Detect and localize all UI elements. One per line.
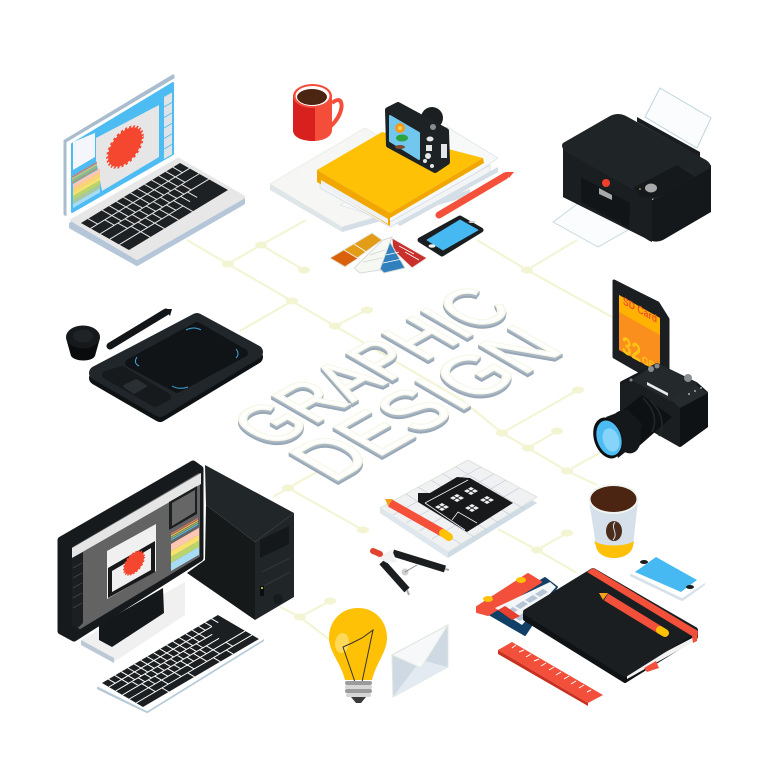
icon: pencil on blueprint: [385, 499, 449, 537]
icon: laptop: [65, 76, 243, 264]
icon: blueprint pad: [380, 460, 537, 558]
icon: envelope: [392, 625, 448, 697]
icon: graphics tablet: [96, 320, 256, 415]
icon: light bulb: [329, 608, 387, 703]
building drawing: [418, 477, 513, 532]
icon: red mug: [293, 84, 341, 141]
connector network: [187, 220, 612, 640]
starburst artwork: [108, 120, 142, 174]
icon: calendar: [477, 574, 557, 635]
title: GRAPHIC DESIGN: [212, 275, 582, 492]
starburst artwork: [124, 547, 144, 579]
icon: small phone: [632, 556, 703, 599]
icon: DSLR camera: [588, 364, 708, 462]
icon: paper stack with yellow book: [270, 127, 498, 232]
keyboard: [81, 163, 228, 250]
label: SD Card: SD Card: [623, 294, 657, 326]
icon: smartphone: [420, 218, 481, 254]
icon: monitor stand: [81, 582, 185, 663]
label: 32: 32: [622, 332, 641, 368]
icon: red ruler: [498, 642, 603, 706]
title line: GRAPHIC: GRAPHIC: [212, 275, 530, 456]
label: GB: GB: [642, 353, 655, 373]
title line: DESIGN: DESIGN: [270, 314, 582, 492]
icon: SD card: [614, 281, 668, 388]
icon: compact camera: [388, 105, 447, 170]
pencil on notebook: [606, 597, 660, 630]
icon: stylus pen: [110, 309, 172, 346]
icon: monitor: [61, 464, 201, 638]
icon: pencil: [439, 172, 514, 215]
icon: colour swatch fan: [330, 233, 427, 273]
icon: desktop keyboard: [99, 614, 262, 711]
icon: drawing compass: [373, 550, 449, 595]
icon: desktop tower: [187, 465, 294, 620]
icon: black notebook: [525, 568, 698, 681]
icon: printer: [553, 88, 711, 247]
icon: coffee cup: [588, 484, 638, 558]
icon: ink pot: [66, 326, 100, 360]
